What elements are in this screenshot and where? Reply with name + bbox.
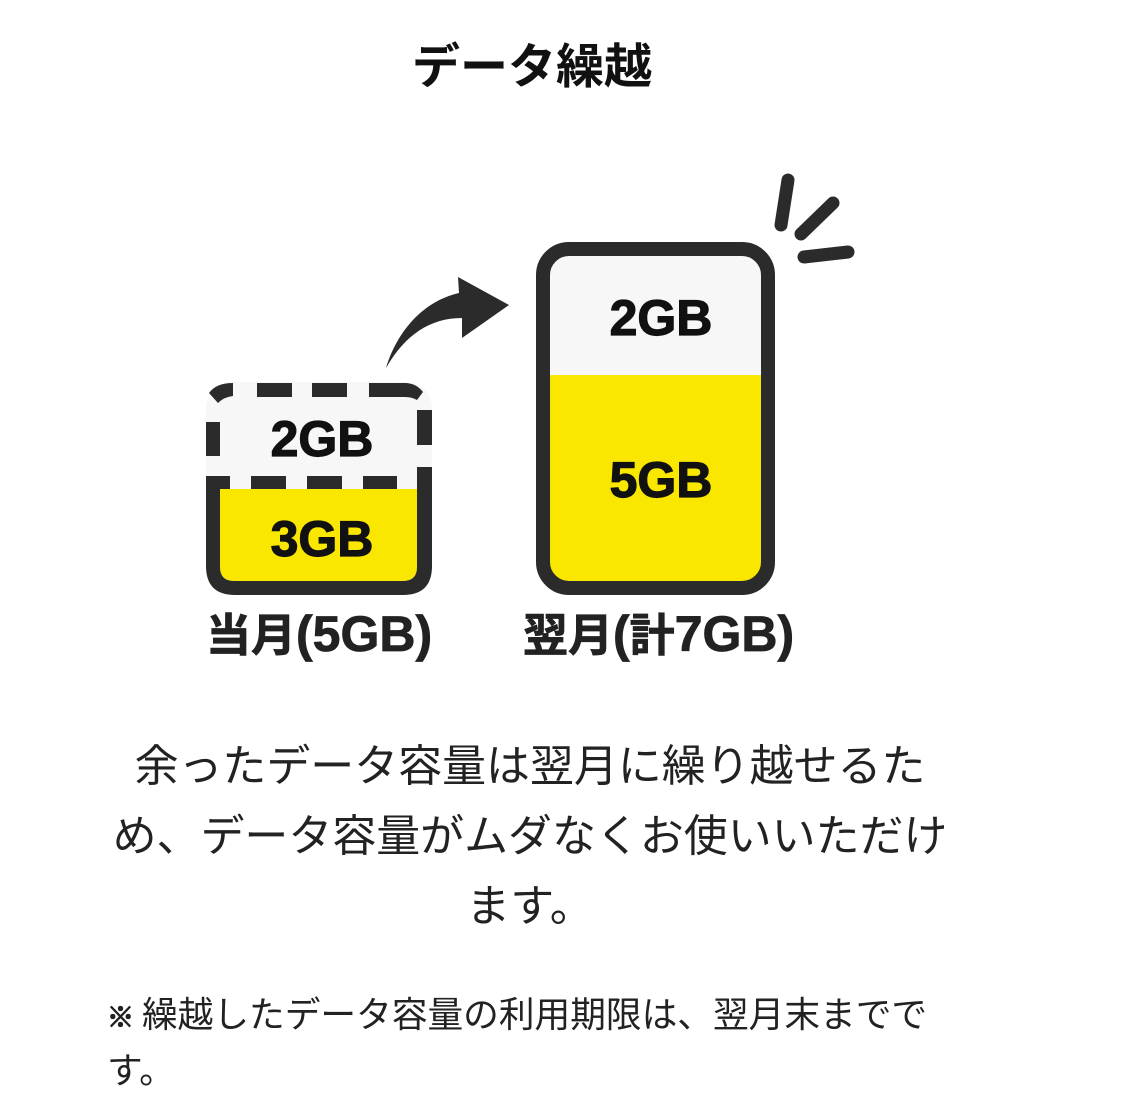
next month container	[543, 249, 768, 588]
current month container: 3GB	[271, 511, 373, 567]
title: データ繰越	[412, 41, 652, 94]
current month container	[206, 382, 432, 595]
description text: め、データ容量がムダなくお使いいただけ	[113, 812, 947, 861]
footnote: ※	[107, 1003, 134, 1033]
next month container: 5GB	[610, 452, 712, 508]
label: next month: 翌月(計7GB)	[523, 606, 794, 662]
description text	[113, 742, 947, 931]
description text: 余ったデータ容量は翌月に繰り越せるた	[135, 742, 925, 791]
current month container: 2GB	[271, 411, 373, 467]
icon: emphasis lines	[781, 180, 848, 257]
footnote	[107, 995, 927, 1091]
icon: curved arrow	[386, 277, 509, 368]
diagram: data carryover	[206, 174, 854, 662]
next month container: 2GB	[610, 290, 712, 346]
description text: ます。	[466, 882, 594, 931]
footnote: 繰越したデータ容量の利用期限は、翌月末までで	[142, 995, 927, 1035]
footnote: す。	[107, 1051, 175, 1091]
label: current month: 当月(5GB)	[206, 606, 432, 662]
